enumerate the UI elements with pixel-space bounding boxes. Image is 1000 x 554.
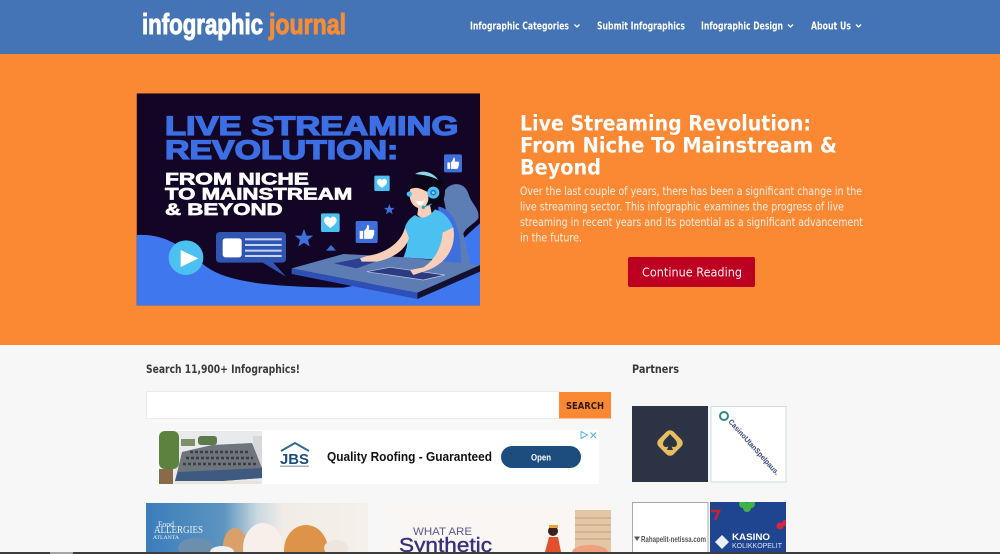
header bar <box>0 0 1000 54</box>
navigation menu: Infographic Design <box>701 20 783 32</box>
hero title: From Niche To Mainstream & <box>520 134 837 158</box>
illustration headline: TO MAINSTREAM <box>165 185 352 203</box>
illustration headline: REVOLUTION: <box>165 135 398 165</box>
logo: infographic <box>142 9 263 41</box>
article card: synthetic <box>400 510 611 552</box>
hero description: in the future. <box>520 230 582 244</box>
illustration headline: FROM NICHE <box>165 170 309 188</box>
logo: journal <box>268 9 346 41</box>
card headline <box>400 528 492 552</box>
ad headline: Quality Roofing - Guaranteed <box>327 450 492 464</box>
illustration headline <box>165 111 458 219</box>
ad photo <box>159 431 262 484</box>
navigation menu: Submit Infographics <box>597 20 685 32</box>
partner tile: rahapelit netissa: Rahapelit-netissa.com <box>641 534 706 544</box>
partner tile: gold spade <box>632 406 708 482</box>
navigation menu <box>470 20 861 32</box>
illustration headline: & BEYOND <box>165 201 283 219</box>
hero description: Over the last couple of years, there has been a significant change in the <box>520 184 862 198</box>
search bar <box>146 392 611 418</box>
partners heading: Partners <box>632 362 679 376</box>
card figure <box>545 525 561 552</box>
search heading: Search 11,900+ Infographics! <box>146 362 300 376</box>
article card: food allergies <box>146 503 368 554</box>
icon: stars and triangle <box>295 204 395 251</box>
card logo: food allergies atlanta: ATLANTA <box>153 535 179 541</box>
card headline: WHAT ARE <box>413 526 472 538</box>
partner tile: casino utan spelpaus: CasinoUtanSpelpaus. <box>727 417 781 477</box>
gaming chair <box>438 184 479 265</box>
JBS logo <box>280 443 309 468</box>
JBS logo: JBS <box>280 451 309 468</box>
partner tile: casino utan spelpaus <box>711 406 786 482</box>
icon: play button <box>169 240 203 275</box>
hero illustration: live streaming <box>137 93 480 306</box>
hero title <box>520 112 837 180</box>
hero panel <box>0 54 1000 345</box>
illustration headline: LIVE STREAMING <box>165 111 458 141</box>
continue reading button: Continue Reading <box>642 264 742 280</box>
ad open button: Open <box>531 452 551 464</box>
streamer scene <box>292 171 480 299</box>
partner tile: kasino kolikkopelit <box>710 500 788 552</box>
hero description: streaming in recent years and its potential as a significant advancement <box>520 215 863 229</box>
partner tile: kasino kolikkopelit: KOLIKKOPELIT <box>732 543 783 550</box>
blue wave <box>137 223 480 306</box>
card logo: food allergies atlanta: Food <box>158 519 175 529</box>
streamer hair and head <box>407 171 445 218</box>
icon: hearts <box>321 176 390 232</box>
card logo: food allergies atlanta: ALLERGIES <box>154 524 203 536</box>
icon: thumbs up <box>356 154 462 243</box>
ad open button <box>501 446 581 468</box>
card logo: food allergies atlanta <box>153 521 202 539</box>
partner tile: rahapelit netissa <box>632 502 708 554</box>
desk with keyboard and mouse pad <box>292 254 480 299</box>
ad banner: roofing <box>158 430 599 484</box>
streamer shirt <box>403 209 453 260</box>
navigation menu: Infographic Categories <box>470 20 569 32</box>
icon: chat bubble <box>216 232 286 277</box>
hero title: Beyond <box>520 156 601 180</box>
bottom browser bar <box>0 552 1000 554</box>
partner tile: kasino kolikkopelit: KASINO <box>732 532 770 543</box>
search bar: SEARCH <box>566 401 604 412</box>
streamer arms <box>360 227 454 275</box>
hero description <box>520 184 863 244</box>
hero title: Live Streaming Revolution: <box>520 112 811 136</box>
ad choices icons <box>581 432 596 438</box>
hero description: live streaming sector. This infographic examines the progress of live <box>520 200 844 214</box>
navigation menu: About Us <box>811 20 851 32</box>
continue reading button <box>628 257 755 287</box>
